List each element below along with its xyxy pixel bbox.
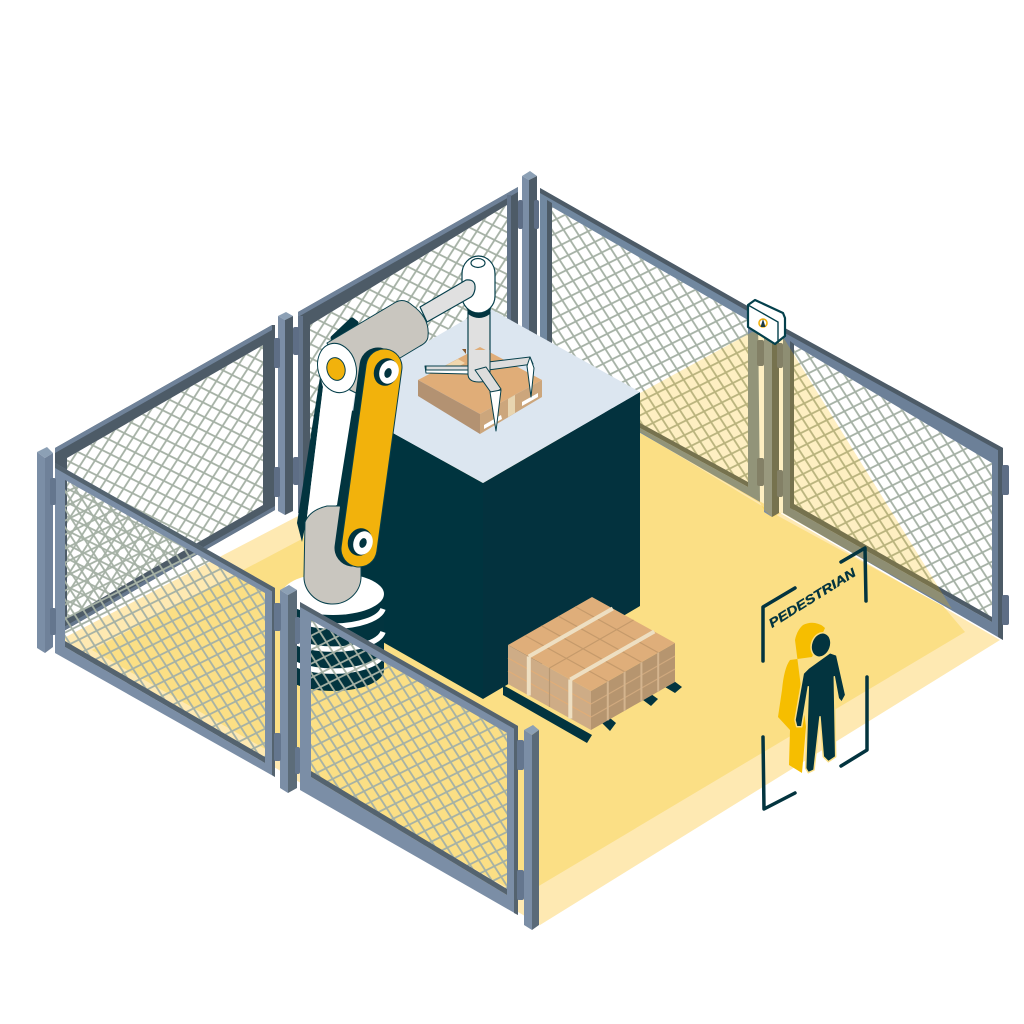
white arm link <box>297 377 355 542</box>
robot base cylinder <box>282 573 384 691</box>
fence panel: right side <box>783 327 1009 640</box>
post: rear left <box>274 312 299 515</box>
box on pedestal with gripper <box>418 347 542 434</box>
yellow arm link <box>344 355 402 559</box>
person <box>795 630 846 773</box>
floor zone <box>60 432 1000 925</box>
wrist head <box>462 256 495 382</box>
fence panel: back left <box>55 325 275 636</box>
pallet <box>503 681 682 743</box>
block: machine pedestal <box>330 307 640 699</box>
thin forearm <box>420 280 475 322</box>
post: front centre <box>274 585 300 793</box>
stack faces <box>508 645 591 730</box>
sensor light cone <box>640 332 952 609</box>
carton <box>418 347 542 434</box>
fence panel: back centre <box>298 187 518 513</box>
gripper <box>425 350 534 431</box>
post: rear corner <box>518 171 539 340</box>
fence panel: front left <box>55 463 275 777</box>
floor inner safety zone <box>92 432 965 896</box>
straps <box>529 608 654 718</box>
post: right corner <box>757 314 783 517</box>
fence panel: back right <box>540 188 760 502</box>
person shadow <box>778 623 825 773</box>
shoulder cylinder <box>312 301 428 397</box>
post: front right <box>517 725 539 930</box>
fence panel: front centre <box>300 602 518 915</box>
detection frame brackets <box>763 548 867 809</box>
floor outer light margin <box>60 432 1000 925</box>
box divisions <box>508 607 675 720</box>
robot arm <box>282 256 495 691</box>
icon: ceiling sensor <box>748 300 785 344</box>
lower joint <box>304 506 361 604</box>
pallet of boxes <box>503 597 682 743</box>
pedestrian detection <box>763 548 867 809</box>
label: PEDESTRIAN <box>766 565 859 631</box>
post: front left <box>37 447 56 653</box>
